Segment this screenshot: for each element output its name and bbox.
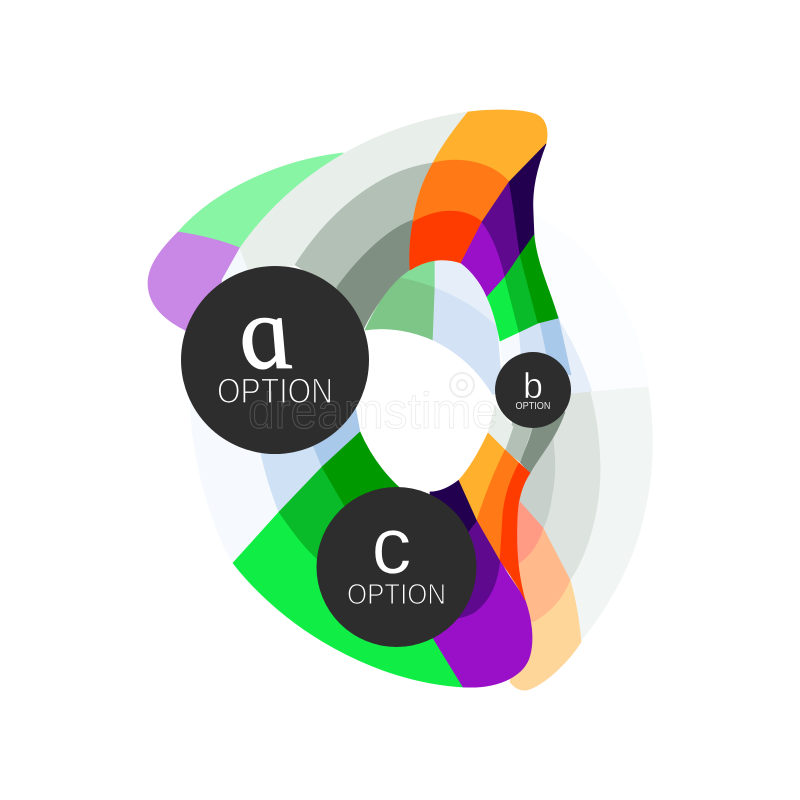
- pink overlap: [510, 502, 543, 563]
- bottom dark purple segment: [440, 520, 500, 620]
- option a badge: OPTION: [217, 372, 333, 411]
- option c badge: c: [372, 501, 412, 590]
- option b badge: b: [523, 365, 543, 406]
- bottom navy segment: [430, 480, 477, 532]
- top red segment: [410, 211, 482, 270]
- bottom red segment: [500, 463, 530, 600]
- option a badge: a: [220, 275, 305, 392]
- grey arc bands top: [240, 112, 468, 340]
- bottom yellow segment: [459, 433, 505, 520]
- pale grey right bands: [488, 387, 653, 642]
- bottom pale orange segment: [510, 580, 581, 690]
- bottom purple segment: [433, 520, 532, 687]
- watermark: dreamstime: [248, 383, 498, 439]
- inner green segments: [365, 261, 435, 340]
- option b badge: [495, 352, 571, 428]
- option a badge: [181, 266, 369, 454]
- bottom green segments: [233, 432, 463, 687]
- bottom peach segment: [510, 528, 570, 622]
- faint right segment: [534, 215, 648, 400]
- top yellow segment: [433, 110, 547, 182]
- bottom orange segment: [477, 450, 519, 560]
- option c badge: OPTION: [347, 579, 446, 611]
- left blue segments: [190, 400, 360, 563]
- option c badge: [316, 487, 476, 647]
- inner blue segments: [433, 260, 571, 395]
- top left green segment: [178, 153, 345, 248]
- top purple segments: [461, 144, 546, 297]
- top orange segment: [413, 160, 509, 222]
- top green segments: [487, 235, 558, 341]
- pale blue corner: [222, 248, 262, 300]
- top left purple segment: [148, 232, 240, 340]
- option b badge: OPTION: [516, 401, 550, 412]
